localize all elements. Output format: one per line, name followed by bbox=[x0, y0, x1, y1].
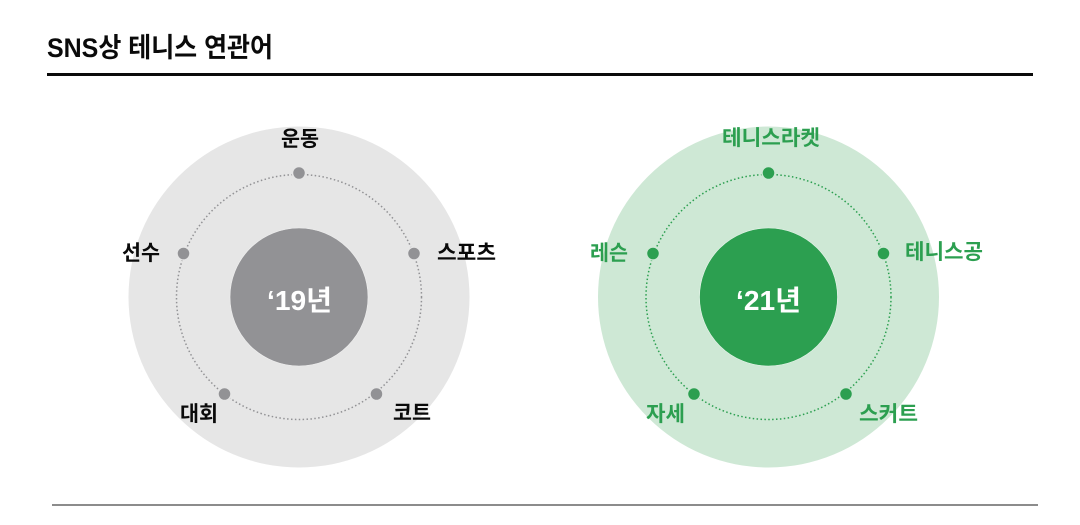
title: SNS상 테니스 연관어 bbox=[47, 33, 273, 63]
center label 2019: ‘19년 bbox=[267, 285, 332, 316]
label: 운동: 운동 bbox=[281, 128, 319, 151]
dotted orbit 2019 bbox=[176, 174, 422, 420]
panel: 2019 keywords bbox=[122, 126, 496, 468]
label: 테니스라켓: 테니스라켓 bbox=[722, 127, 820, 150]
outer circle 2019 bbox=[128, 126, 470, 468]
center circle 2021 bbox=[700, 228, 838, 366]
node dots 2021 bbox=[646, 166, 890, 400]
label: 스커트: 스커트 bbox=[859, 403, 918, 426]
label: 레슨: 레슨 bbox=[590, 242, 628, 265]
outer circle 2021 bbox=[598, 126, 939, 468]
title rule bbox=[47, 73, 1033, 76]
center label 2021: ‘21년 bbox=[736, 285, 801, 316]
center circle 2019 bbox=[230, 228, 368, 366]
label: 선수: 선수 bbox=[122, 242, 160, 265]
dotted orbit 2021 bbox=[646, 174, 891, 420]
label: 자세: 자세 bbox=[646, 403, 685, 426]
label: 스포츠: 스포츠 bbox=[437, 242, 496, 265]
node dots 2019 bbox=[177, 166, 420, 400]
label: 테니스공: 테니스공 bbox=[905, 241, 983, 264]
label: 대회: 대회 bbox=[180, 403, 218, 426]
panel: 2021 keywords bbox=[590, 126, 983, 468]
bottom rule bbox=[52, 504, 1038, 506]
label: 코트: 코트 bbox=[393, 402, 431, 425]
